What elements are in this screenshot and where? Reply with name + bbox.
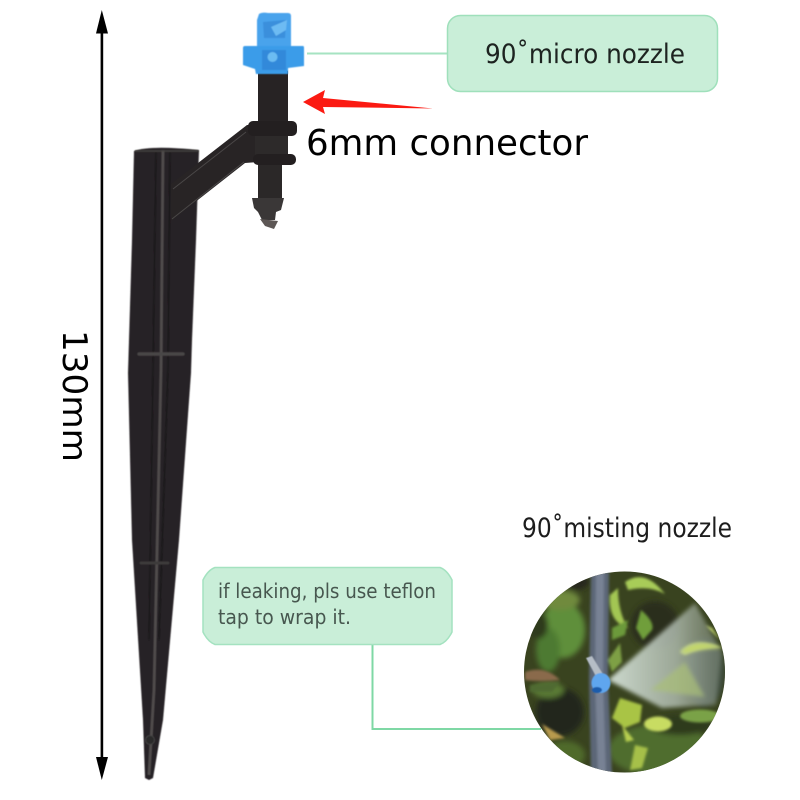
upper collar — [248, 121, 297, 136]
connector line — [307, 52, 447, 54]
label text: 90˚micro nozzle — [485, 39, 685, 70]
stake centre rib — [135, 150, 198, 775]
nozzle stem — [586, 656, 602, 676]
bracket arm — [171, 125, 258, 221]
callout box — [203, 568, 452, 644]
callout text: if leaking, pls use teflon — [218, 579, 436, 603]
vertical stem — [258, 70, 288, 124]
dimension label: 130mm: 130mm — [54, 330, 94, 462]
blue micro nozzle — [243, 13, 304, 74]
heading: 90 degree misting nozzle: 90˚misting nozzle — [522, 513, 732, 544]
barbed tip — [252, 198, 284, 220]
leader line — [372, 644, 541, 729]
blue nozzle — [592, 673, 610, 693]
label box — [448, 16, 718, 92]
stake body — [128, 148, 199, 780]
top callout: 90 degree micro nozzle — [307, 16, 718, 92]
red arrow pointing to connector — [303, 90, 433, 114]
pipe — [589, 572, 612, 775]
product: ground stake with nozzle — [128, 13, 304, 780]
callout text: tap to wrap it. — [218, 605, 351, 629]
connector label: 6mm connector: 6mm connector — [306, 123, 588, 164]
spray cone — [608, 603, 722, 708]
teflon callout — [203, 568, 541, 729]
circular photo: misting nozzle in use — [520, 570, 730, 776]
lower collar — [253, 154, 296, 165]
dimension arrow: 130mm height — [96, 10, 108, 780]
